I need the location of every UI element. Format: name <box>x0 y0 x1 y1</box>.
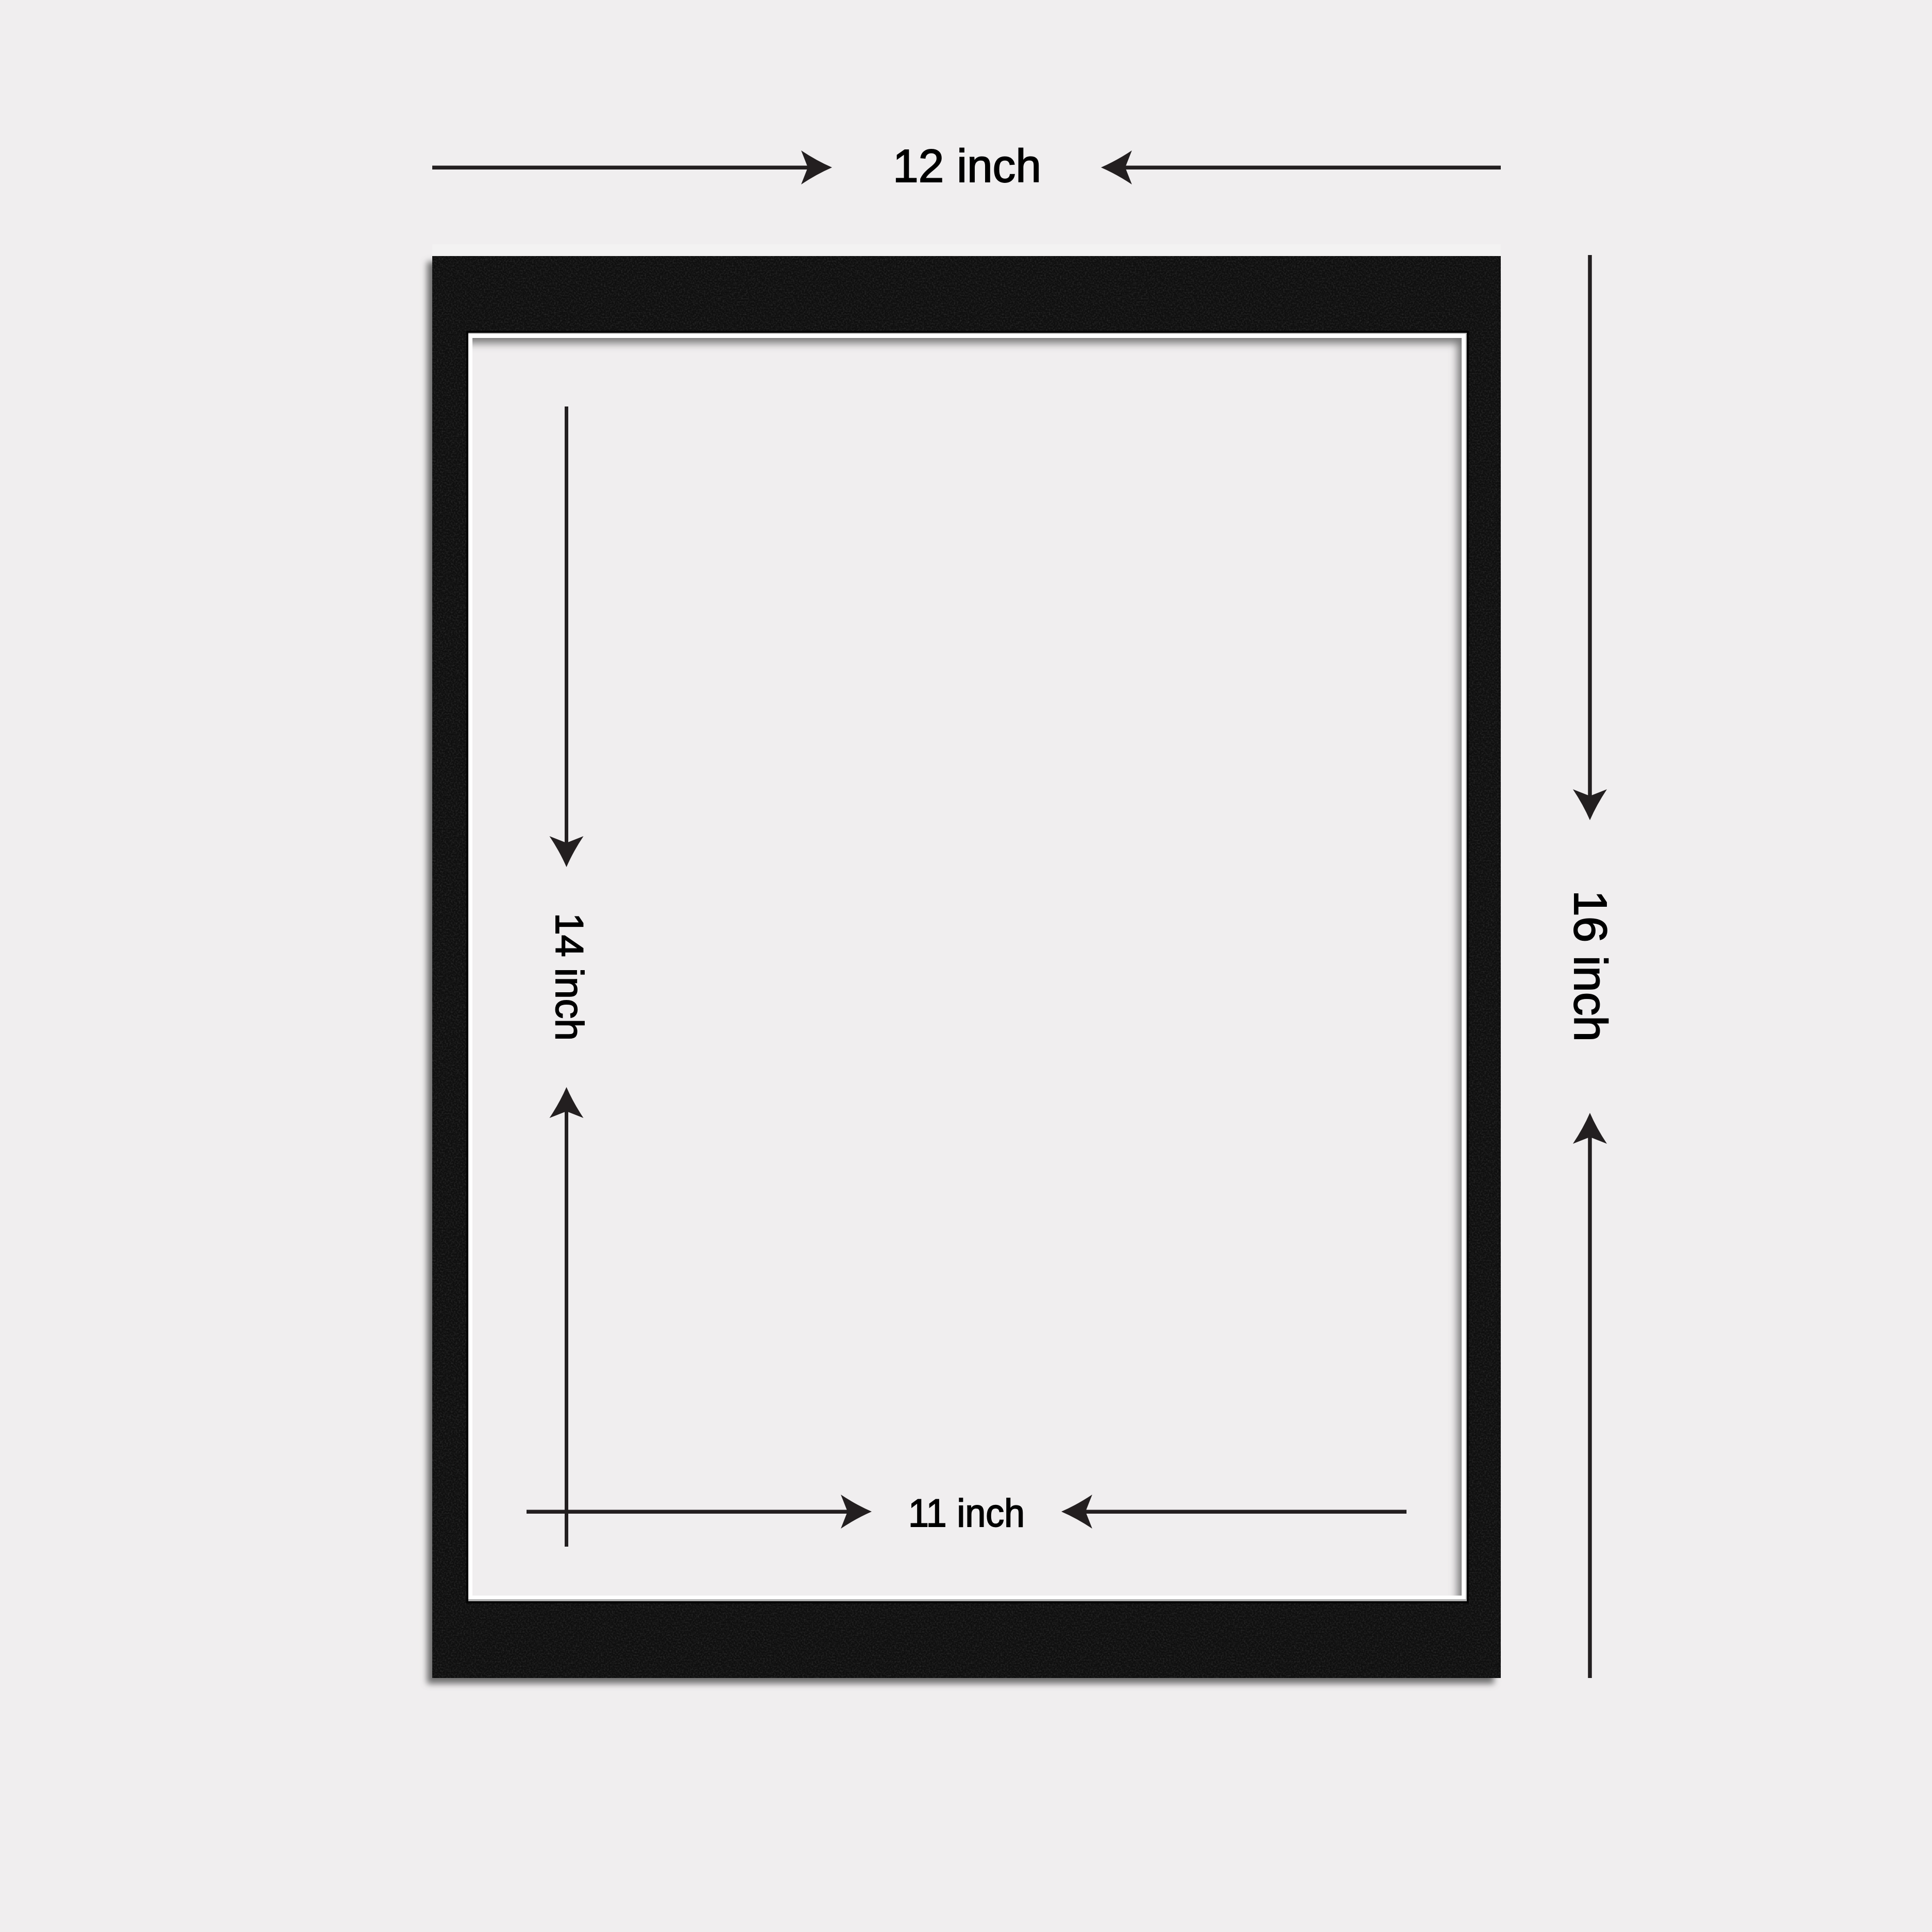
arrow: 11 inch right <box>1061 1495 1406 1529</box>
window interior <box>472 338 1462 1596</box>
inner shadow on top and right of window <box>443 319 1473 1618</box>
white bevel face <box>468 334 1466 1599</box>
dark bevel edge of window <box>467 332 1468 1602</box>
arrow: 12 inch right <box>1101 150 1501 184</box>
arrow: 11 inch left <box>527 1495 872 1529</box>
label: 11 inch: 11 inch <box>908 1492 1025 1535</box>
mat paper texture <box>432 256 1501 1678</box>
arrow: 16 inch top <box>1573 255 1607 820</box>
arrow: 14 inch top <box>549 406 583 867</box>
label: 16 inch: 16 inch <box>1564 890 1616 1042</box>
panel: black picture mat <box>427 244 1501 1684</box>
white bevel of window <box>468 333 1467 1601</box>
faint highlight around mat <box>432 244 1501 256</box>
label: 14 inch: 14 inch <box>547 913 591 1041</box>
arrow: 16 inch bottom <box>1573 1113 1607 1678</box>
arrow: 14 inch bottom <box>549 1087 583 1547</box>
mat drop shadow <box>427 262 1494 1684</box>
arrow: 12 inch left <box>432 150 832 184</box>
mat board with window <box>432 256 1501 1678</box>
heading: 12 inch: 12 inch <box>893 141 1041 192</box>
